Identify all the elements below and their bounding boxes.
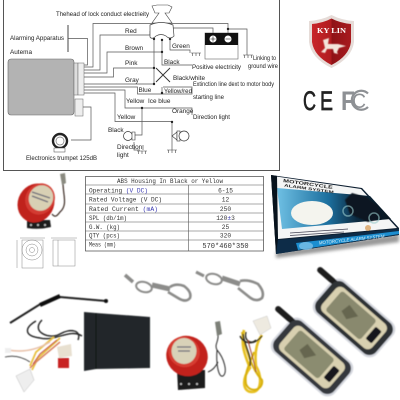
diagram labels: Yellow/red: [164, 88, 192, 95]
diagram labels: Pink: [125, 60, 138, 67]
diagram labels: [10, 11, 278, 162]
diagram labels: Yellow: [126, 98, 145, 105]
table rows: [89, 188, 249, 251]
diagram labels: starting line: [193, 94, 224, 101]
diagram labels: Thehead of lock conduct electrieity: [56, 11, 150, 18]
table rows: 12: [222, 196, 229, 204]
ground symbols: [137, 53, 253, 154]
icon: ignition lock: [150, 5, 174, 38]
diagram labels: Orange: [172, 108, 194, 115]
box title: MOTORCYCLE: [283, 178, 333, 190]
logo: KY LIN shield: KY LIN: [317, 28, 346, 35]
table: ABS housing specifications: [86, 176, 264, 251]
photo: siren with bracket: [10, 173, 66, 229]
diagram labels: Linking to: [253, 55, 276, 62]
table rows: 25: [222, 224, 229, 231]
diagram labels: Black: [108, 127, 124, 134]
icon: trumpet speaker: [53, 134, 67, 152]
photo: rear remote control: [294, 262, 399, 362]
logo: FCC mark: [341, 86, 368, 116]
diagram labels: Direction: [117, 144, 143, 151]
photo: product box: [271, 175, 399, 258]
logo: CE mark: E: [320, 86, 333, 116]
diagram frame: [4, 0, 280, 170]
alarm module: [8, 59, 84, 116]
box subtitle: ALARM SYSTEM: [284, 184, 334, 194]
diagram labels: Red: [125, 28, 137, 35]
table header: ABS Housing In Black or Yellow: [117, 178, 223, 185]
box caption lines: [290, 229, 348, 236]
diagram labels: ground wire: [248, 63, 278, 70]
logo: CE mark: C: [303, 86, 316, 116]
diagram labels: Electronics trumpet 125dB: [26, 155, 97, 162]
table rows: 120±3: [216, 215, 235, 222]
table rows: Rated Current (mA): [89, 206, 158, 213]
box seal: [365, 225, 371, 231]
drawing: siren dimensions: [17, 238, 77, 268]
table rows: 6-15: [218, 188, 233, 194]
diagram labels: Black/white: [173, 75, 205, 82]
diagram labels: Gray: [125, 77, 140, 84]
photo: control module with wiring: [5, 312, 150, 392]
diagram labels: Blue: [138, 87, 152, 94]
table rows: SPL (db/1m): [89, 215, 127, 222]
diagram labels: Positive electricity: [192, 64, 242, 71]
table rows: 320: [220, 232, 231, 240]
diagram labels: Brown: [125, 45, 144, 52]
table rows: QTY (pcs): [89, 232, 120, 240]
diagram labels: Autema: [10, 49, 32, 56]
diagram labels: Extinction line dext to motor body: [193, 81, 275, 88]
photo: antenna wire: [10, 296, 108, 323]
table rows: Meas (mm): [89, 242, 116, 248]
logo: CE mark: [303, 86, 333, 116]
photo: key clip 1: [125, 275, 190, 300]
logo: KY LIN shield: [309, 15, 354, 68]
antenna bar: [67, 25, 69, 52]
box emblem: [299, 242, 313, 250]
table rows: G.W. (kg): [89, 224, 120, 231]
photo: siren with cable: [159, 321, 225, 390]
wiring lines: [68, 24, 247, 150]
table rows: 250: [220, 206, 231, 213]
diagram labels: Direction light: [193, 114, 230, 121]
box footer title: MOTORCYCLE ALARM SYSTEM: [319, 234, 385, 245]
table rows: Rated Voltage (V DC): [89, 196, 162, 204]
panel: wiring diagram: [4, 0, 280, 170]
diagram labels: Black: [164, 59, 180, 66]
icon: right direction light: [172, 131, 189, 141]
diagram labels: light: [117, 152, 129, 159]
diagram labels: Alarming Apparatus: [10, 35, 64, 42]
photo: coiled yellow harness: [240, 316, 271, 392]
icon: battery: [205, 33, 238, 59]
table rows: 570*460*350: [202, 243, 249, 251]
logo: FCC mark: F: [341, 86, 355, 116]
photo: key clip 2: [196, 272, 263, 300]
icon: left direction light: [124, 132, 135, 140]
photo: front remote control: [252, 301, 357, 400]
diagram labels: Yellow: [117, 114, 136, 121]
diagram labels: Ice blue: [148, 98, 171, 105]
logo: FCC mark: C: [352, 90, 366, 113]
diagram labels: Green: [172, 43, 190, 50]
table rows: Operating (V DC): [89, 188, 148, 194]
